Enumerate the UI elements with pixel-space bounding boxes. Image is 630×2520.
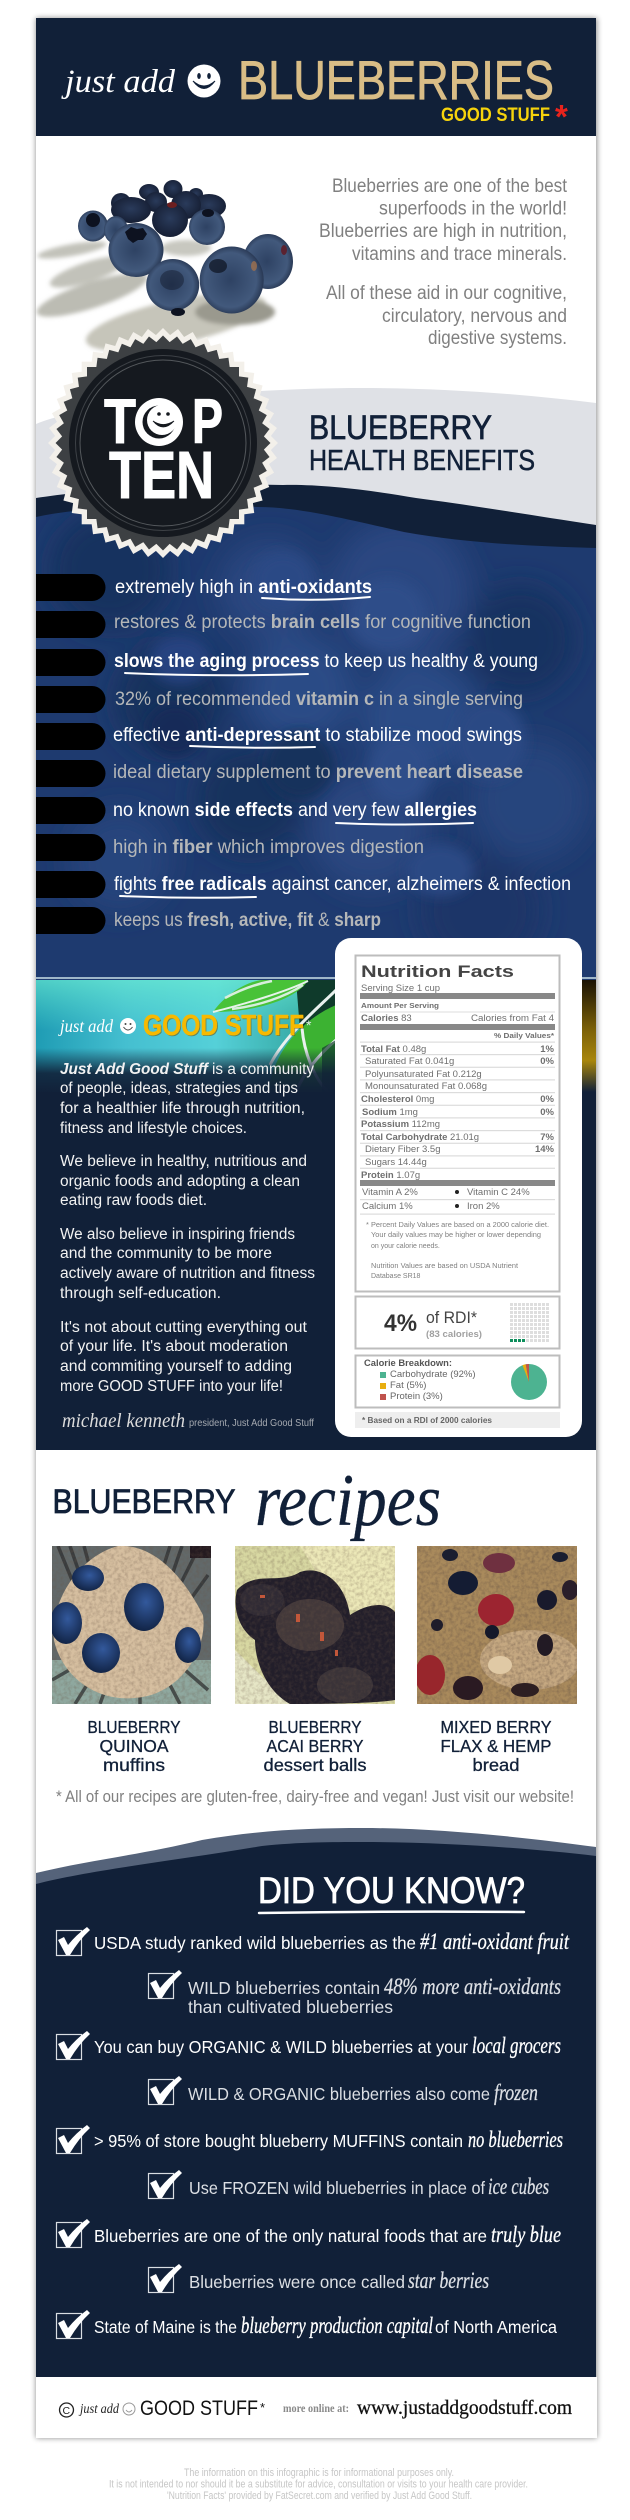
about copy: and commiting yourself to adding [60, 1358, 292, 1375]
header banner [36, 18, 596, 136]
photo: blueberries [33, 180, 293, 363]
fact 9: blueberry production capital [241, 2313, 433, 2338]
footer [36, 2377, 597, 2438]
signature: michael kenneth [62, 1410, 185, 1432]
fact 2: 48% more anti-oxidants [384, 1974, 561, 1999]
rdi footnote: * Based on a RDI of 2000 calories [362, 1416, 493, 1425]
nutrition label: Your daily values may be higher or lower depending [371, 1232, 541, 1239]
footer logo: GOOD STUFF [140, 2397, 258, 2420]
nutrition label: Monounsaturated Fat 0.068g [365, 1081, 487, 1092]
fact 1 [56, 1927, 569, 1956]
about copy: of your life. It's about moderation [60, 1338, 288, 1355]
nutrition label: Calories 83 [361, 1013, 412, 1024]
about copy: We believe in healthy, nutritious and [60, 1153, 307, 1170]
benefit 2 [36, 611, 531, 638]
benefit 2: restores & protects brain cells for cognitive function [114, 612, 531, 633]
about copy: for a healthier life through nutrition, [60, 1100, 305, 1117]
rdi box: of RDI* [426, 1308, 477, 1327]
panel: about good stuff [36, 980, 596, 1450]
benefit 8: high in fiber which improves digestion [113, 837, 424, 858]
fact 9: State of Maine is the [94, 2317, 237, 2337]
nutrition label: Potassium 112mg [361, 1119, 440, 1130]
about copy: Just Add Good Stuff is a community [60, 1061, 314, 1078]
fact 8 [148, 2264, 489, 2293]
nutrition label: Sodium 1mg [362, 1107, 418, 1118]
rdi dot grid [510, 1304, 550, 1340]
nutrition label: 0% [540, 1107, 555, 1118]
rdi box [356, 1296, 560, 1348]
nutrition label: Nutrition Facts [361, 962, 514, 981]
panel: did you know [36, 1828, 596, 2377]
fact 7: truly blue [491, 2222, 561, 2247]
logo: just add good stuff: GOOD STUFF [143, 1010, 304, 1042]
recipe captions: BLUEBERRY [268, 1717, 362, 1737]
about copy: eating raw foods diet. [60, 1192, 207, 1209]
logo: just add good stuff: * [306, 1017, 312, 1033]
fact 9 [56, 2310, 557, 2338]
photo: blueberry quinoa muffin [50, 1546, 211, 1704]
fact 2 [148, 1970, 561, 2017]
gold strip at right [582, 980, 596, 1092]
card: nutrition facts [335, 938, 582, 1437]
heading: blueberry health benefits [309, 409, 535, 477]
nutrition label: % Daily Values* [494, 1031, 554, 1040]
rdi box: 4% [384, 1310, 417, 1337]
recipe captions: BLUEBERRY [88, 1717, 181, 1737]
header sub: good stuff: GOOD STUFF [441, 104, 550, 126]
heading: blueberry recipes: BLUEBERRY [52, 1483, 236, 1521]
footer url: www.justaddgoodstuff.com [357, 2397, 572, 2419]
nutrition label: 1% [540, 1044, 555, 1055]
red asterisk: * [555, 98, 568, 135]
nutrition label: Sugars 14.44g [365, 1157, 427, 1168]
benefit 9 [36, 871, 571, 898]
nutrition label: Serving Size 1 cup [361, 983, 440, 994]
nutrition label: Calcium 1% [362, 1201, 413, 1212]
benefit 6 [36, 760, 523, 787]
recipe captions: dessert balls [264, 1755, 367, 1775]
fact 8: star berries [408, 2268, 489, 2293]
heading: did you know: DID YOU KNOW? [258, 1870, 525, 1911]
photo: mixed berry flax and hemp bread [415, 1546, 580, 1704]
calorie breakdown box: Fat (5%) [390, 1380, 426, 1391]
nutrition label: Vitamin C 24% [467, 1187, 530, 1198]
nutrition label: Vitamin A 2% [362, 1187, 418, 1198]
nutrition label: Cholesterol 0mg [361, 1094, 434, 1105]
intro text: Blueberries are high in nutrition, [319, 221, 567, 242]
gray swoosh [36, 388, 596, 525]
nutrition label: on your calorie needs. [371, 1243, 440, 1250]
fact 3 [56, 2031, 561, 2060]
header title: blueberries: BLUEBERRIES [238, 49, 554, 111]
benefit 10: keeps us fresh, active, fit & sharp [114, 910, 381, 931]
fact 6: ice cubes [488, 2174, 549, 2199]
nutrition label: Iron 2% [467, 1201, 500, 1212]
fact 5 [56, 2125, 563, 2154]
logo: just add good stuff: just add [58, 1016, 114, 1036]
footer logo: * [260, 2400, 265, 2415]
fact 2: WILD blueberries contain [188, 1978, 380, 1998]
benefit 4: 32% of recommended vitamin c in a single serving [115, 689, 523, 710]
fact 3: local grocers [472, 2033, 561, 2058]
nutrition label: Amount Per Serving [361, 1001, 439, 1010]
benefit 6: ideal dietary supplement to prevent heart disease [113, 762, 523, 783]
intro text: Blueberries are one of the best [332, 176, 568, 197]
benefit 5 [36, 723, 522, 750]
leaf art [213, 980, 336, 1095]
about copy: actively aware of nutrition and fitness [60, 1265, 315, 1282]
about copy: of people, ideas, strategies and tips [60, 1080, 298, 1097]
logo: just add good stuff: GOOD STUFF [144, 1011, 305, 1043]
recipe captions: QUINOA [100, 1736, 169, 1756]
nutrition label: Total Carbohydrate 21.01g [361, 1132, 479, 1143]
fact 8: Blueberries were once called [189, 2272, 405, 2292]
copyright mark: C [62, 2405, 70, 2417]
footer logo [78, 2397, 265, 2420]
nutrition label: Protein 1.07g [361, 1170, 420, 1181]
benefit 4 [36, 686, 523, 713]
nutrition label: Nutrition Values are based on USDA Nutrient [371, 1263, 518, 1270]
calorie breakdown box: Carbohydrate (92%) [390, 1369, 476, 1380]
about copy: more GOOD STUFF into your life! [60, 1378, 283, 1395]
benefit 5: effective anti-depressant to stabilize mood swings [113, 725, 522, 746]
nutrition label: Saturated Fat 0.041g [365, 1056, 454, 1067]
benefit 1 [36, 574, 372, 601]
heading: blueberry health benefits: HEALTH BENEFITS [309, 445, 535, 477]
fact 1: USDA study ranked wild blueberries as the [94, 1933, 416, 1953]
nutrition label: Polyunsaturated Fat 0.212g [365, 1069, 482, 1080]
nutrition label: 7% [540, 1132, 555, 1143]
fact 6 [148, 2170, 549, 2199]
intro text: digestive systems. [428, 328, 567, 349]
calorie breakdown box: Calorie Breakdown: [364, 1358, 452, 1369]
benefit 9: fights free radicals against cancer, alzheimers & infection [114, 874, 571, 895]
pie chart: calorie breakdown [511, 1364, 547, 1400]
recipe captions: FLAX & HEMP [440, 1736, 552, 1756]
nutrition label: Calories from Fat 4 [471, 1013, 554, 1024]
footer url: more online at: [283, 2403, 349, 2415]
logo: just add good stuff [58, 1010, 312, 1043]
badge word: top: T [104, 387, 136, 457]
fact 5: > 95% of store bought blueberry MUFFINS contain [94, 2131, 463, 2151]
about copy: through self-education. [60, 1285, 221, 1302]
fact 7: Blueberries are one of the only natural foods that are [94, 2226, 487, 2246]
benefit 3: slows the aging process to keep us healthy & young [114, 651, 538, 672]
copyright mark [60, 2403, 74, 2417]
benefit 7 [36, 797, 477, 824]
benefit 8 [36, 834, 424, 861]
panel: top ten benefits background [36, 480, 596, 980]
intro text: All of these aid in our cognitive, [326, 283, 567, 304]
recipes note: * All of our recipes are gluten-free, dairy-free and vegan! Just visit our website! [56, 1787, 574, 1806]
fact 4 [148, 2076, 538, 2105]
benefit 10 [36, 907, 381, 934]
footer logo: just add [78, 2402, 120, 2417]
fact 4: frozen [494, 2080, 538, 2105]
nutrition label: Database SR18 [371, 1273, 421, 1280]
calorie breakdown box: Protein (3%) [390, 1391, 443, 1402]
heading: blueberry recipes [52, 1460, 441, 1542]
heading: blueberry health benefits: BLUEBERRY [309, 409, 492, 447]
nutrition label [356, 956, 560, 1292]
recipe captions: ACAI BERRY [266, 1736, 364, 1756]
benefit 3 [36, 649, 538, 676]
calorie breakdown box [356, 1356, 560, 1408]
disclaimer: It is not intended to nor should it be a substitute for advice, consultation or visits to your health care provider. [109, 2478, 528, 2490]
badge: top ten [48, 328, 278, 558]
disclaimer [109, 2467, 528, 2502]
benefit 7: no known side effects and very few allergies [113, 800, 477, 821]
recipe captions: muffins [103, 1755, 165, 1775]
intro text: superfoods in the world! [379, 198, 567, 220]
recipe captions: bread [472, 1755, 520, 1775]
photo: blueberry acai dessert balls [235, 1546, 395, 1704]
fact 2: than cultivated blueberries [188, 1997, 393, 2017]
fact 4: WILD & ORGANIC blueberries also come [188, 2084, 490, 2104]
badge word: top: P [192, 387, 223, 457]
about copy [60, 1061, 315, 1395]
fact 1: #1 anti-oxidant fruit [420, 1929, 569, 1954]
about copy: and the community to be more [60, 1245, 272, 1262]
about copy: organic foods and adopting a clean [60, 1173, 300, 1190]
disclaimer: 'Nutrition Facts' provided by FatSecret.com and verified by Just Add Good Stuff. [167, 2490, 472, 2502]
fact 3: You can buy ORGANIC & WILD blueberries at your [94, 2037, 468, 2057]
nutrition label: 0% [540, 1094, 555, 1105]
header text: just add: just add [61, 64, 176, 100]
benefit 1: extremely high in anti-oxidants [115, 577, 372, 598]
fact 6: Use FROZEN wild blueberries in place of [189, 2178, 485, 2198]
about copy: fitness and lifestyle choices. [60, 1120, 247, 1137]
disclaimer: The information on this infographic is for informational purposes only. [184, 2467, 454, 2479]
nutrition label: 0% [540, 1056, 555, 1067]
fact 5: no blueberries [468, 2127, 563, 2152]
nutrition label: Total Fat 0.48g [361, 1044, 426, 1055]
nutrition label: Dietary Fiber 3.5g [365, 1144, 441, 1155]
about copy: We also believe in inspiring friends [60, 1226, 295, 1243]
recipe captions [88, 1717, 552, 1775]
signature [62, 1410, 314, 1432]
heading: blueberry recipes: recipes [255, 1460, 441, 1542]
signature: president, Just Add Good Stuff [189, 1418, 314, 1429]
icon: smiley [188, 64, 220, 98]
intro text: circulatory, nervous and [382, 306, 567, 327]
badge word: top [104, 387, 223, 457]
recipe captions: MIXED BERRY [440, 1717, 552, 1737]
rdi footnote [355, 1412, 560, 1428]
intro text: vitamins and trace minerals. [352, 244, 567, 265]
nutrition label: * Percent Daily Values are based on a 2000 calorie diet. [366, 1222, 549, 1229]
rdi box: (83 calories) [426, 1329, 482, 1340]
about copy: It's not about cutting everything out [60, 1319, 308, 1336]
fact 7 [56, 2219, 561, 2248]
intro text [319, 176, 568, 349]
nutrition label: 14% [535, 1144, 555, 1155]
badge word: ten: TEN [109, 438, 214, 513]
fact 9: of North America [435, 2317, 557, 2337]
